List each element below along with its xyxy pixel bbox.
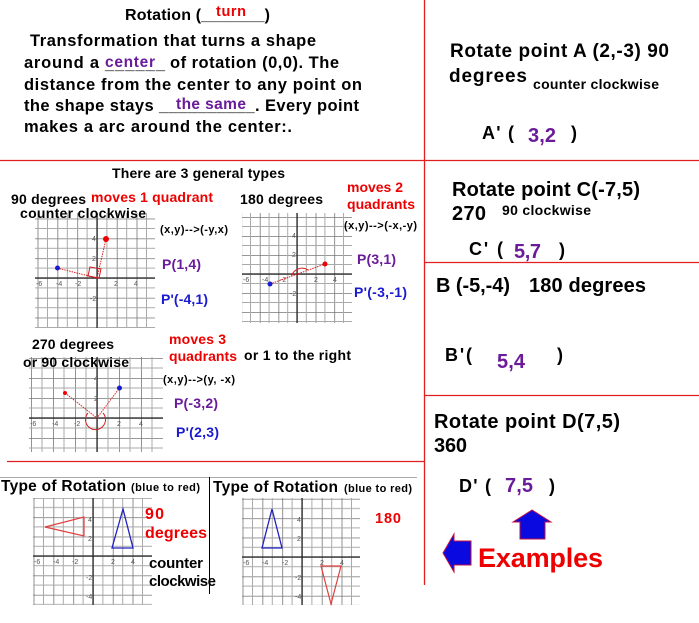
answer value: 5,7 (514, 241, 541, 263)
prompt: 360: 360 (434, 435, 467, 457)
answer label A': A' ( (482, 123, 514, 143)
graph: 270 degree rotation: 2 (117, 421, 121, 428)
graph: 270 degree rotation: 2 (94, 396, 98, 403)
panel: example D (434, 411, 620, 497)
prompt: rotate point D: Rotate point D(7,5) (434, 411, 620, 433)
graph: triangles 180: -2 (282, 560, 288, 567)
rule: (x,y)-->(-y,x) (160, 224, 228, 236)
graph: triangles 180: 2 (297, 536, 301, 543)
answer: 90 degrees: 90 (145, 506, 164, 523)
panel: example A (449, 41, 669, 147)
graph: triangles 180: -4 (295, 594, 301, 601)
graph: 270 degree rotation: -2 (74, 421, 80, 428)
graph: 180 degree rotation: -4 (262, 277, 268, 284)
graph: 180 degree rotation: -2 (280, 277, 286, 284)
graph: 180 degree rotation (242, 213, 352, 323)
arrow: left (443, 534, 471, 572)
graph: 180 degree rotation: -2 (290, 291, 296, 298)
graph: triangles 90: -4 (86, 594, 92, 601)
definition text block: ______ (104, 55, 166, 73)
heading: rotation: Rotation (_______) (125, 7, 270, 24)
closing paren: ) (571, 123, 577, 143)
prompt: point B: B (-5,-4) (436, 275, 510, 297)
heading: 3 general types: There are 3 general types (112, 165, 285, 181)
heading: Type of Rotation (1, 478, 126, 495)
graph: triangles 90: -6 (34, 559, 40, 566)
answer: 90 degrees: degrees (145, 525, 207, 542)
label: moves 3 quadrants: quadrants (169, 348, 237, 364)
prompt: counter clockwise: counter clockwise (533, 76, 659, 92)
prompt: 180 degrees: 180 degrees (529, 275, 646, 297)
graph: 90 degree rotation (35, 213, 155, 328)
graph: triangles 90: -2 (86, 575, 92, 582)
label: 180 degrees: 180 degrees (240, 191, 323, 207)
answer: 180: 180 (375, 511, 401, 527)
graph: 90 degree rotation: -2 (75, 281, 81, 288)
graph: triangles 90 (33, 498, 152, 605)
graph: triangles 90: 2 (88, 536, 92, 543)
label: examples: Examples (478, 543, 603, 573)
graph: 180 degree rotation: 2 (292, 252, 296, 259)
graph: 270 degree rotation (29, 357, 163, 452)
answer: 90 degrees (145, 506, 207, 542)
label: moves 3 quadrants: moves 3 (169, 331, 226, 347)
rule: (x,y)-->(-x,-y) (344, 220, 417, 232)
panel: rotation definition (24, 4, 362, 136)
graph: triangles 90: 4 (131, 559, 135, 566)
label: counter clockwise: counter clockwise (20, 205, 146, 221)
closing paren: ) (549, 476, 555, 496)
definition text block: around a (24, 54, 100, 72)
graph: 270 degree rotation: -4 (52, 421, 58, 428)
graph: 270 degree rotation: -6 (30, 421, 36, 428)
closing paren: ) (557, 345, 563, 365)
answer value: 3,2 (528, 125, 556, 147)
answer: center: center (105, 54, 155, 71)
graph: triangles 90: 4 (88, 517, 92, 524)
graph: 180 degree rotation: 4 (292, 233, 296, 240)
rule: (x,y)-->(y, -x) (163, 374, 235, 386)
answer label B': B'( (445, 345, 472, 365)
point P: P(1,4) (162, 256, 201, 272)
closing paren: ) (559, 240, 565, 260)
subheading: (blue to red) (131, 482, 200, 494)
graph: 90 degree rotation: -4 (56, 281, 62, 288)
answer: the same: the same (176, 96, 246, 113)
panel: 270 degrees (23, 331, 351, 452)
label: moves 2 quadrants: quadrants (347, 196, 415, 212)
label: or 90 clockwise: or 90 clockwise (23, 354, 129, 370)
graph: 90 degree rotation: 4 (92, 236, 96, 243)
panel: type of rotation 180 (213, 479, 412, 605)
label: moves 2 quadrants: moves 2 (347, 179, 403, 195)
answer value: 5,4 (497, 351, 526, 373)
label: moves 1 quadrant: moves 1 quadrant (91, 189, 213, 205)
graph: triangles 180: 4 (297, 517, 301, 524)
panel: example C (452, 179, 640, 263)
graph: triangles 90: -4 (53, 559, 59, 566)
point P: P(-3,2) (174, 395, 218, 411)
graph: triangles 180 (242, 498, 360, 605)
answer: turn: turn (216, 4, 246, 20)
prompt: rotate point C: Rotate point C(-7,5) (452, 179, 640, 201)
prompt: 270: 270 (452, 203, 486, 225)
prompt: degrees: degrees (449, 66, 527, 87)
definition text block: Transformation that turns a shape (30, 32, 316, 50)
graph: 90 degree rotation: -6 (36, 281, 42, 288)
graph: triangles 180: -2 (295, 575, 301, 582)
definition text block: the shape stays __________. Every point (24, 97, 360, 115)
panel: 90 degrees (11, 189, 228, 328)
graph: triangles 180: -6 (243, 560, 249, 567)
answer value: 7,5 (505, 475, 533, 497)
graph: triangles 180: 4 (340, 560, 344, 567)
point P': P'(-4,1) (161, 291, 208, 307)
answer: counter clockwise: counter (149, 555, 203, 572)
panel: example B (436, 275, 646, 373)
arrow: up (513, 510, 551, 539)
graph: triangles 90: 2 (111, 559, 115, 566)
answer: counter clockwise: clockwise (149, 573, 216, 590)
graph: 90 degree rotation: -2 (90, 296, 96, 303)
label: moves 3 quadrants (169, 331, 237, 364)
prompt: 90 clockwise: 90 clockwise (502, 202, 591, 218)
answer: counter clockwise (149, 555, 216, 590)
prompt: rotate point A: Rotate point A (2,-3) 90 (450, 41, 669, 62)
graph: triangles 180: -4 (262, 560, 268, 567)
graph: 180 degree rotation: 4 (333, 277, 337, 284)
graph: 270 degree rotation: 4 (94, 376, 98, 383)
point P': P'(-3,-1) (354, 284, 407, 300)
graph: triangles 90: -2 (72, 559, 78, 566)
graph: 90 degree rotation: 2 (114, 281, 118, 288)
heading: Type of Rotation (213, 479, 338, 496)
point P': P'(2,3) (176, 424, 219, 440)
label: 90 degrees: 90 degrees (11, 191, 86, 207)
graph: triangles 180: 2 (320, 560, 324, 567)
panel: type of rotation 90 (1, 478, 216, 605)
label: or 1 to the right: or 1 to the right (244, 347, 351, 363)
graph: 270 degree rotation: 4 (139, 421, 143, 428)
graph: 90 degree rotation: 2 (92, 256, 96, 263)
definition text block: makes a arc around the center:. (24, 118, 292, 136)
graph: 180 degree rotation: -6 (243, 277, 249, 284)
definition text block: of rotation (0,0). The (170, 54, 339, 72)
label: moves 2 quadrants (347, 179, 415, 212)
definition text block: distance from the center to any point on (24, 76, 362, 94)
point P: P(3,1) (357, 251, 396, 267)
label: 270 degrees: 270 degrees (32, 336, 114, 352)
graph: 180 degree rotation: 2 (314, 277, 318, 284)
panel: 180 degrees (240, 179, 417, 323)
graph: 90 degree rotation: 4 (134, 281, 138, 288)
answer label C': C' ( (469, 239, 503, 259)
answer label D': D' ( (459, 476, 491, 496)
subheading: (blue to red) (344, 483, 412, 495)
definition text block (24, 32, 362, 136)
